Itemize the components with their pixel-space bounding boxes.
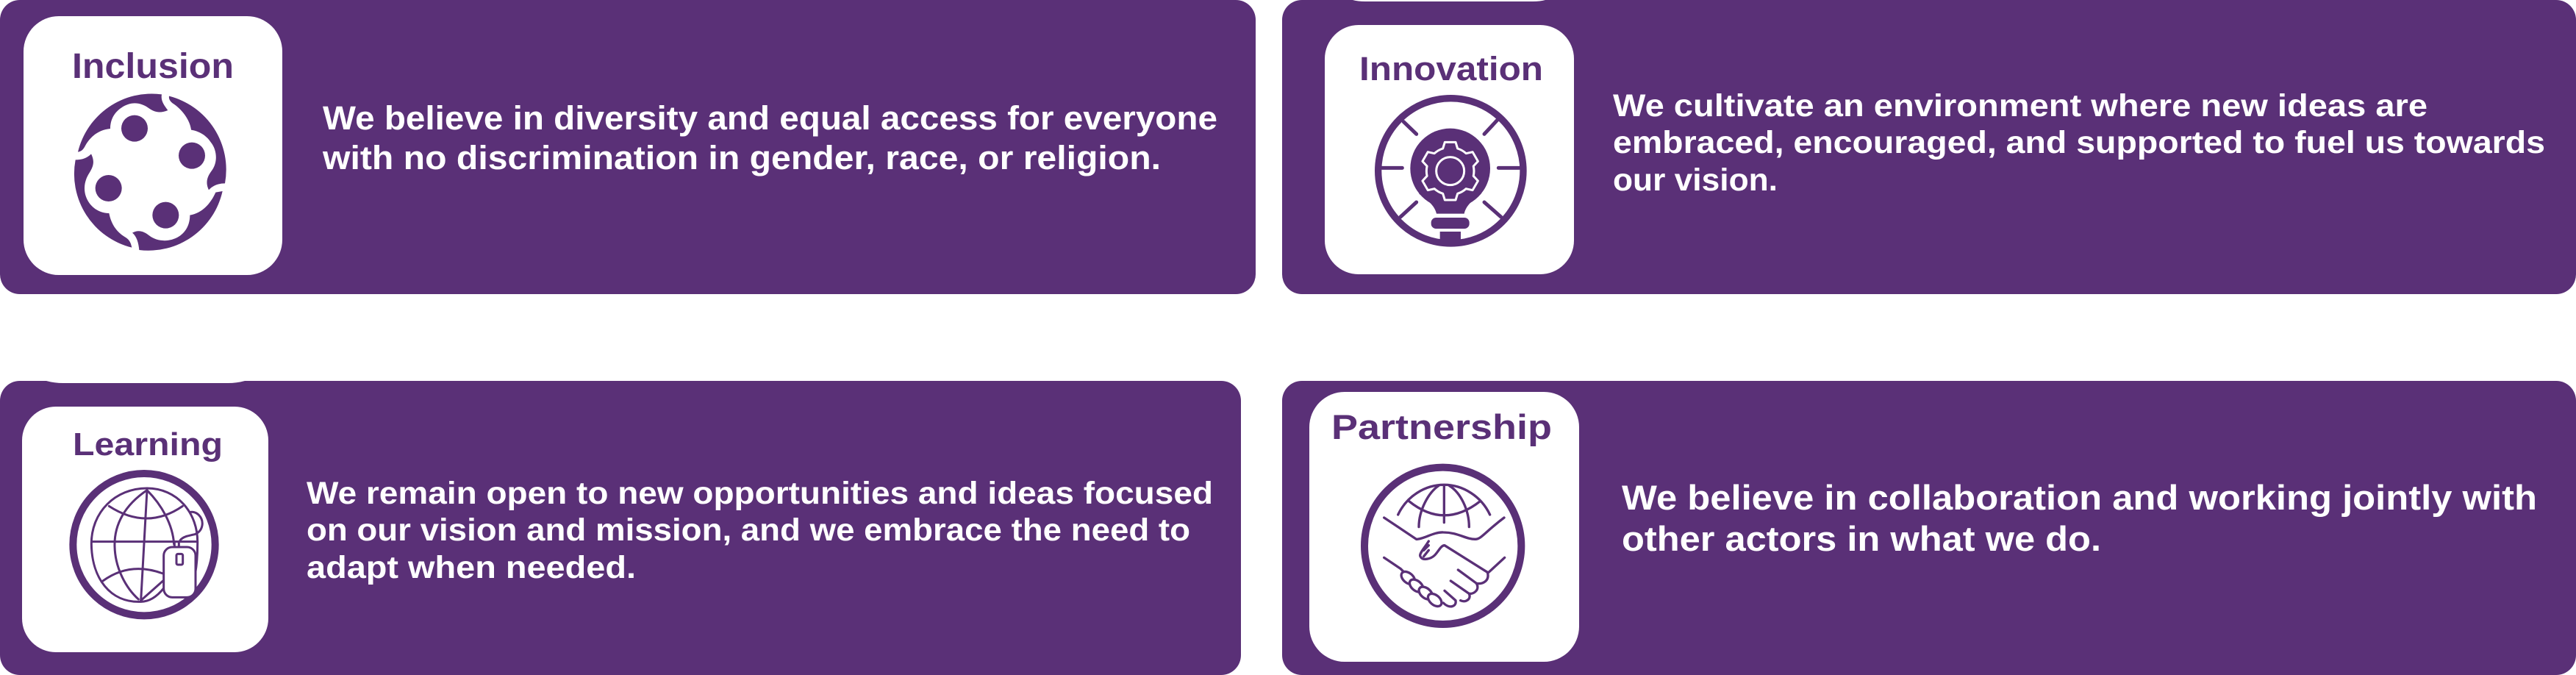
text: learning description: [307, 476, 1213, 585]
panel: innovation: [1282, 0, 2576, 294]
text: partnership description: [1622, 478, 2537, 558]
card: inclusion: [24, 16, 282, 275]
icon: people circle: [74, 93, 226, 251]
panel: inclusion: [0, 0, 1256, 294]
panel: partnership: [1282, 381, 2576, 675]
heading: learning: Learning: [73, 426, 223, 463]
text: innovation description: [1613, 88, 2545, 198]
text: learning description: on our vision and mission, and we embrace the need to: [307, 512, 1190, 548]
text: learning description: adapt when needed.: [307, 550, 636, 585]
icon: globe with mouse: [73, 474, 215, 615]
text: learning description: We remain open to new opportunities and ideas focused: [307, 476, 1213, 511]
panel: learning: [0, 381, 1241, 675]
text: innovation description: embraced, encouraged, and supported to fuel us towards: [1613, 125, 2545, 160]
text: partnership description: other actors in what we do.: [1622, 519, 2101, 558]
heading: innovation: Innovation: [1359, 50, 1543, 88]
text: partnership description: We believe in collaboration and working jointly with: [1622, 478, 2537, 517]
card: innovation: [1325, 25, 1574, 274]
text: innovation description: We cultivate an environment where new ideas are: [1613, 88, 2427, 124]
text: inclusion description: with no discrimination in gender, race, or religion.: [322, 139, 1161, 176]
heading: inclusion: Inclusion: [72, 47, 234, 86]
text: inclusion description: We believe in diversity and equal access for everyone: [323, 99, 1217, 137]
card: learning: [22, 407, 268, 652]
text: innovation description: our vision.: [1613, 162, 1778, 198]
icon: handshake with globe: [1364, 468, 1521, 624]
heading: partnership: Partnership: [1331, 407, 1552, 446]
card: partnership: [1309, 392, 1579, 662]
text: inclusion description: [322, 99, 1217, 176]
icon: light bulb with gear: [1378, 99, 1523, 243]
